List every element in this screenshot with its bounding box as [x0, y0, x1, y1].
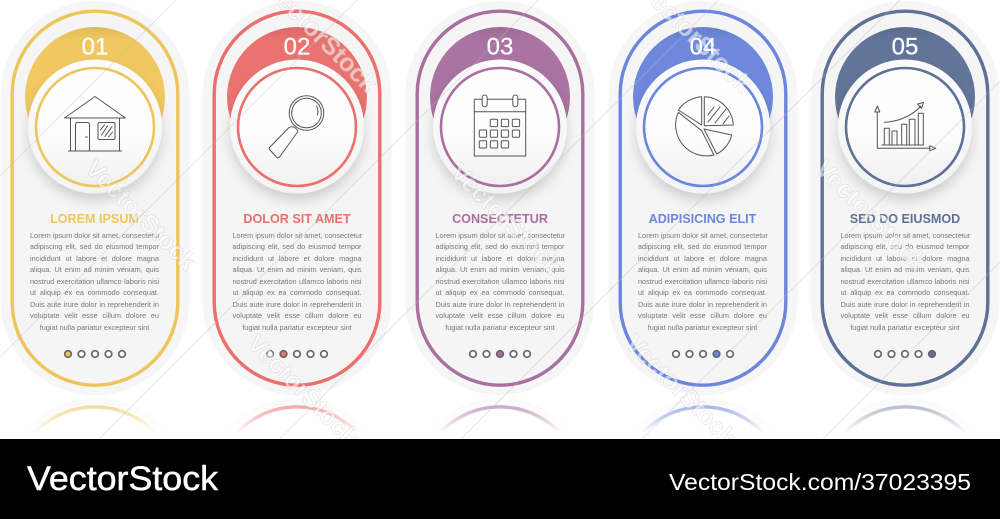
body text: aliqua. Ut enim ad minim veniam, quis	[30, 265, 159, 274]
icon disc	[28, 60, 162, 194]
body text: voluptate velit esse cillum dolore eu	[232, 311, 362, 320]
body text: Lorem ipsum dolor sit amet, consectetur	[232, 230, 362, 240]
body text: ut aliquip ex ea commodo consequat.	[436, 288, 564, 297]
body text	[30, 230, 160, 332]
outlined pill	[417, 11, 583, 385]
body text	[638, 230, 768, 332]
card 03: consectetur	[406, 1, 594, 431]
pagination dots	[875, 351, 935, 357]
body text: Lorem ipsum dolor sit amet, consectetur	[840, 230, 970, 240]
body text: voluptate velit esse cillum dolore eu	[840, 311, 970, 320]
icon disc	[636, 60, 770, 194]
outer halo	[202, 1, 392, 395]
icon: growth chart	[875, 102, 936, 151]
body text: Duis aute irure dolor in reprehenderit in	[840, 300, 970, 309]
body text: adipiscing elit, sed do eiusmod tempor	[638, 242, 767, 251]
reflection	[440, 405, 560, 431]
footer bar	[0, 439, 1000, 519]
outlined pill	[12, 11, 177, 385]
icon disc	[433, 60, 567, 194]
body text: Duis aute irure dolor in reprehenderit in	[30, 300, 159, 309]
body text: incididunt ut labore et dolore magna	[840, 254, 970, 263]
body text: fugiat nulla pariatur excepteur sint	[445, 323, 555, 332]
body text: voluptate velit esse cillum dolore eu	[638, 311, 767, 320]
body text: nostrud exercitation ullamco laboris nisi	[840, 277, 970, 286]
body text: aliqua. Ut enim ad minim veniam, quis	[436, 265, 564, 274]
outlined pill	[822, 11, 988, 385]
body text: fugiat nulla pariatur excepteur sint	[648, 323, 757, 332]
heading: DOLOR SIT AMET	[243, 212, 351, 226]
reflection	[845, 405, 965, 431]
body text	[232, 230, 362, 332]
body text: Lorem ipsum dolor sit amet, consectetur	[638, 230, 768, 240]
pagination dots	[470, 351, 530, 357]
reflection	[642, 405, 764, 432]
body text: aliqua. Ut enim ad minim veniam, quis	[840, 265, 970, 274]
body text: fugiat nulla pariatur excepteur sint	[850, 323, 960, 332]
body text: Lorem ipsum dolor sit amet, consectetur	[436, 230, 565, 240]
number: 03	[487, 34, 513, 60]
body text: adipiscing elit, sed do eiusmod tempor	[30, 242, 159, 251]
outlined pill	[620, 11, 785, 385]
body text: incididunt ut labore et dolore magna	[30, 254, 159, 263]
heading: SED DO EIUSMOD	[850, 212, 960, 226]
pagination dots	[64, 351, 125, 357]
body text: adipiscing elit, sed do eiusmod tempor	[232, 242, 362, 251]
footer image id: VectorStock.com/37023395	[669, 469, 971, 495]
number: 04	[689, 34, 716, 60]
watermark text	[80, 0, 932, 451]
card 05: sed do eiusmod	[810, 1, 1000, 431]
body text: nostrud exercitation ullamco laboris nisi	[30, 277, 159, 286]
body text: incididunt ut labore et dolore magna	[232, 254, 362, 263]
body text: ut aliquip ex ea commodo consequat.	[30, 288, 159, 297]
heading: ADIPISICING ELIT	[649, 212, 756, 226]
coloured number cap	[24, 27, 164, 167]
body text: nostrud exercitation ullamco laboris nisi	[638, 277, 767, 286]
card 01: lorem ipsum	[0, 1, 190, 432]
reflection	[34, 405, 156, 432]
outer halo	[810, 1, 1000, 395]
body text: ut aliquip ex ea commodo consequat.	[232, 288, 362, 297]
outer halo	[406, 1, 594, 395]
card 02: dolor sit amet	[202, 1, 392, 432]
number: 02	[284, 34, 310, 60]
body text: voluptate velit esse cillum dolore eu	[30, 311, 159, 320]
body text	[436, 230, 566, 332]
outer halo	[0, 1, 189, 395]
heading: LOREM IPSUM	[50, 212, 139, 226]
body text: fugiat nulla pariatur excepteur sint	[40, 323, 149, 332]
coloured number cap	[835, 27, 975, 167]
body text: Duis aute irure dolor in reprehenderit in	[436, 300, 564, 309]
icon: pie chart	[675, 97, 733, 156]
body text: nostrud exercitation ullamco laboris nisi	[232, 277, 362, 286]
watermark text: VectorStock	[80, 154, 202, 276]
icon: magnifier	[269, 96, 324, 158]
body text: Duis aute irure dolor in reprehenderit in	[232, 300, 362, 309]
pagination dots	[672, 351, 733, 357]
outlined pill	[214, 11, 380, 385]
icon: house	[64, 96, 125, 151]
reflection	[236, 405, 358, 432]
coloured number cap	[632, 27, 772, 167]
body text: aliqua. Ut enim ad minim veniam, quis	[638, 265, 767, 274]
body text: adipiscing elit, sed do eiusmod tempor	[436, 242, 564, 251]
body text: incididunt ut labore et dolore magna	[436, 254, 564, 263]
pagination dots	[267, 351, 327, 357]
coloured number cap	[227, 27, 367, 167]
coloured number cap	[430, 27, 570, 167]
body text	[840, 230, 970, 332]
body text: fugiat nulla pariatur excepteur sint	[242, 323, 352, 332]
heading: CONSECTETUR	[452, 212, 548, 226]
icon: calendar	[474, 95, 526, 156]
number: 05	[892, 34, 918, 60]
body text: ut aliquip ex ea commodo consequat.	[840, 288, 970, 297]
body text: Lorem ipsum dolor sit amet, consectetur	[30, 230, 160, 240]
body text: nostrud exercitation ullamco laboris nisi	[436, 277, 564, 286]
watermark text: VectorStock	[810, 154, 932, 276]
body text: voluptate velit esse cillum dolore eu	[436, 311, 564, 320]
body text: Duis aute irure dolor in reprehenderit in	[638, 300, 767, 309]
icon disc	[230, 60, 364, 194]
watermark text: VectorStock	[445, 158, 567, 280]
outer halo	[608, 1, 797, 395]
number: 01	[81, 34, 108, 60]
body text: aliqua. Ut enim ad minim veniam, quis	[232, 265, 362, 274]
body text: adipiscing elit, sed do eiusmod tempor	[840, 242, 970, 251]
card 04: adipisicing elit	[608, 1, 798, 432]
footer logo: VectorStock	[27, 460, 219, 498]
body text: ut aliquip ex ea commodo consequat.	[638, 288, 767, 297]
body text: incididunt ut labore et dolore magna	[638, 254, 767, 263]
icon disc	[838, 60, 972, 194]
